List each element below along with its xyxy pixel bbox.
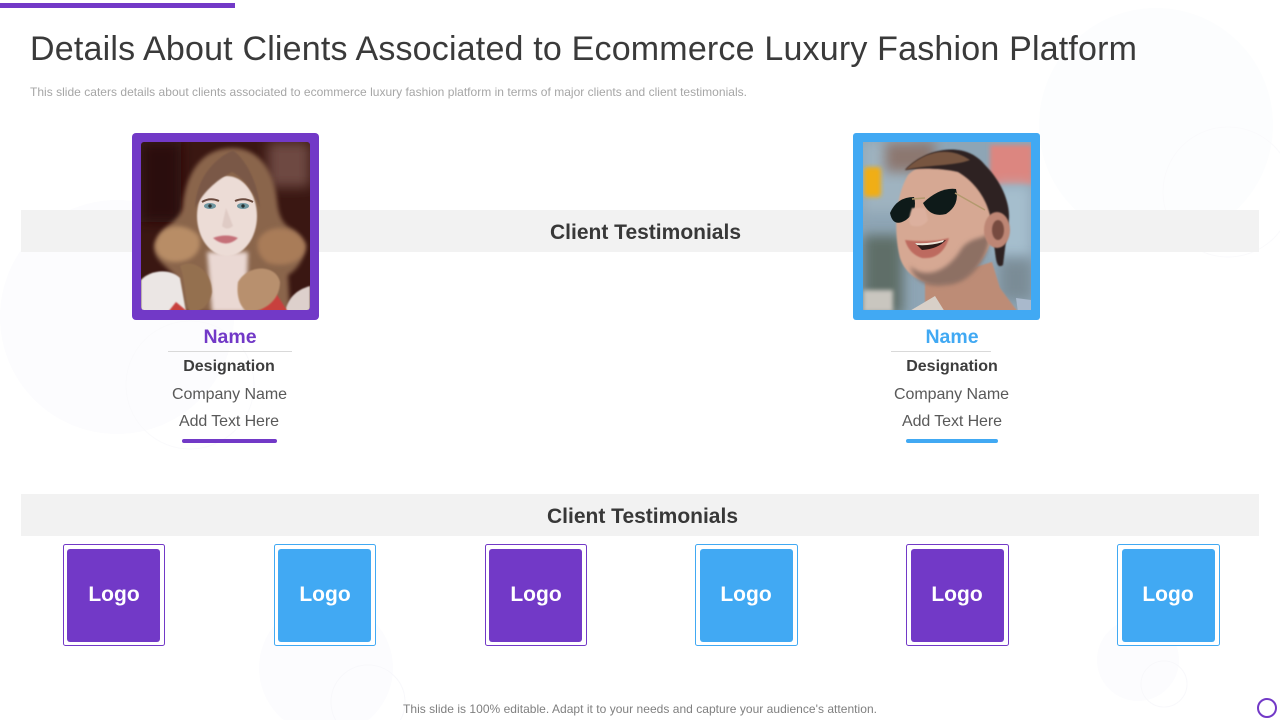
logo 6: Logo [1142, 583, 1194, 606]
client card left: purple [168, 326, 292, 443]
right curl [257, 228, 306, 265]
company name: Company Name [172, 386, 287, 403]
mouth [905, 238, 949, 258]
add text: Add Text Here [179, 413, 279, 430]
title: Details About Clients Associated to Ecommerce Luxury Fashion Platform [30, 30, 1137, 68]
add text: Add Text Here [902, 413, 1002, 430]
logo 2: Logo [299, 583, 351, 606]
hairline [195, 150, 260, 208]
hair mass [155, 148, 304, 312]
dress [168, 302, 186, 310]
footer note: This slide is 100% editable. Adapt it to your needs and capture your audience's attention. [403, 702, 877, 716]
logo 4 [696, 544, 798, 646]
sunglasses [923, 189, 957, 215]
photo card: man [853, 133, 1040, 320]
client card right: blue [891, 326, 1009, 443]
face [197, 176, 257, 256]
beard [910, 232, 990, 286]
accent underline [182, 439, 277, 443]
banner: client testimonials bottom [21, 494, 1259, 536]
client name: Name [203, 326, 257, 348]
logo 3: Logo [510, 583, 562, 606]
icon: corner circle [1258, 699, 1276, 717]
company name: Company Name [894, 386, 1009, 403]
lower curls [180, 264, 212, 312]
banner: client testimonials top [21, 210, 1259, 252]
top accent bar [0, 3, 235, 8]
logo 5 [906, 544, 1008, 646]
left shoulder [141, 271, 186, 312]
ear [984, 212, 1010, 248]
logo 6 [1118, 544, 1220, 646]
photo card: woman [132, 133, 319, 320]
banner: client testimonials bottom: Client Testimonials [547, 505, 738, 528]
logo 2 [274, 544, 376, 646]
left curl [155, 226, 200, 262]
logo 1: Logo [88, 583, 140, 606]
nose [909, 208, 928, 226]
designation: Designation [906, 358, 998, 375]
client name: Name [925, 326, 979, 348]
designation: Designation [183, 358, 275, 375]
logo 1 [64, 544, 164, 646]
neck and chest [207, 252, 248, 312]
right shoulder [285, 286, 310, 312]
logo 3 [486, 544, 586, 646]
neck [925, 262, 1018, 312]
subtitle: This slide caters details about clients associated to ecommerce luxury fashion platform in terms of major clients and client testimonials. [30, 85, 747, 99]
logo 5: Logo [931, 583, 983, 606]
hair [905, 150, 1009, 266]
banner: client testimonials top: Client Testimonials [550, 221, 741, 244]
head [896, 163, 995, 283]
accent underline [906, 439, 998, 443]
logo 4: Logo [720, 583, 772, 606]
